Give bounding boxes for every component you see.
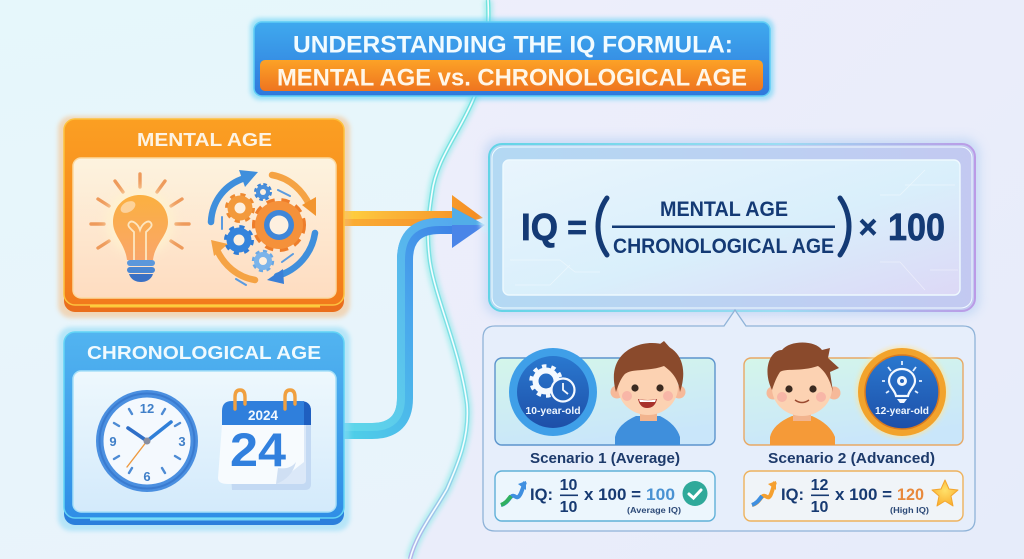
title line 1: UNDERSTANDING THE IQ FORMULA:	[293, 32, 733, 58]
scenario 2 calculation: IQ:	[781, 486, 804, 504]
panel: chronological age	[58, 327, 350, 531]
icon: rising arrow green blue	[501, 481, 526, 505]
scenario 1 calculation: x 100 =	[584, 486, 641, 504]
icon: clock: 6	[143, 469, 151, 484]
scenario 1 calculation: 10	[560, 477, 578, 494]
heading: chronological age: CHRONOLOGICAL AGE	[87, 342, 321, 363]
badge: 10-year-old: 10-year-old	[526, 405, 580, 417]
badge: 12-year-old: 12-year-old	[875, 405, 929, 417]
scenario 1 calculation: IQ:	[530, 486, 553, 504]
gear: small blue top	[256, 184, 270, 200]
icon: check badge	[682, 481, 708, 506]
scenario 2 calculation: 12	[811, 477, 828, 494]
scenario 2 calculation	[744, 471, 963, 521]
scenario 2 calculation: 120	[897, 486, 924, 504]
badge: 12-year-old	[856, 346, 948, 438]
icon: star	[932, 480, 958, 506]
icon: gears with cycle arrows	[211, 170, 316, 285]
icon: light bulb	[91, 174, 189, 282]
scenario 2 calculation: 10	[811, 499, 828, 516]
formula: denominator: CHRONOLOGICAL AGE	[613, 235, 834, 258]
arrow: chronological age to formula	[344, 207, 498, 431]
heading: mental age: MENTAL AGE	[137, 129, 272, 150]
scenario 2 calculation: x 100 =	[835, 486, 892, 504]
scenario 2 calculation: (High IQ)	[890, 506, 929, 515]
icon: clock	[96, 390, 198, 492]
panel: scenarios	[483, 310, 975, 531]
icon: calendar: 2024	[248, 408, 279, 423]
gear: large orange	[255, 201, 303, 249]
formula: left parenthesis	[598, 198, 607, 255]
label: scenario 1: Scenario 1 (Average)	[530, 451, 680, 467]
character: smiling boy in blue shirt	[610, 341, 686, 445]
scenario 1 image box	[495, 358, 715, 445]
scenario 1 calculation: 10	[560, 499, 578, 516]
scenario 1 calculation: 100	[646, 486, 675, 504]
icon: clock: 9	[109, 434, 117, 449]
title banner	[250, 18, 774, 100]
formula: numerator: MENTAL AGE	[660, 198, 788, 221]
formula: IQ equals: IQ	[521, 207, 558, 249]
title line 2: MENTAL AGE vs. CHRONOLOGICAL AGE	[277, 64, 747, 92]
icon: calendar: 24	[230, 423, 286, 476]
panel: formula	[484, 138, 980, 316]
panel: formula: 100	[888, 207, 945, 249]
icon: rising arrow blue orange	[752, 481, 776, 505]
panel: formula: =	[567, 209, 587, 247]
icon: calendar	[218, 390, 311, 490]
gear: light blue bottom	[254, 252, 272, 270]
formula: times 100: ×	[859, 209, 877, 245]
badge: 10-year-old	[509, 348, 597, 436]
scenario 2 image box	[744, 358, 963, 445]
scenario 1 calculation	[495, 471, 715, 521]
arrow: mental age to formula	[344, 195, 483, 226]
icon: clock: 12	[140, 401, 154, 416]
icon: clock: 3	[178, 434, 186, 449]
scenario 1 calculation: (Average IQ)	[627, 506, 681, 515]
formula: right parenthesis	[840, 198, 849, 255]
divider: glowing wavy line	[410, 0, 488, 559]
gear: small orange	[227, 195, 253, 221]
character: boy in orange shirt	[766, 342, 840, 445]
label: scenario 2: Scenario 2 (Advanced)	[768, 451, 935, 467]
gear: medium blue	[226, 227, 252, 253]
panel: mental age	[58, 116, 350, 318]
